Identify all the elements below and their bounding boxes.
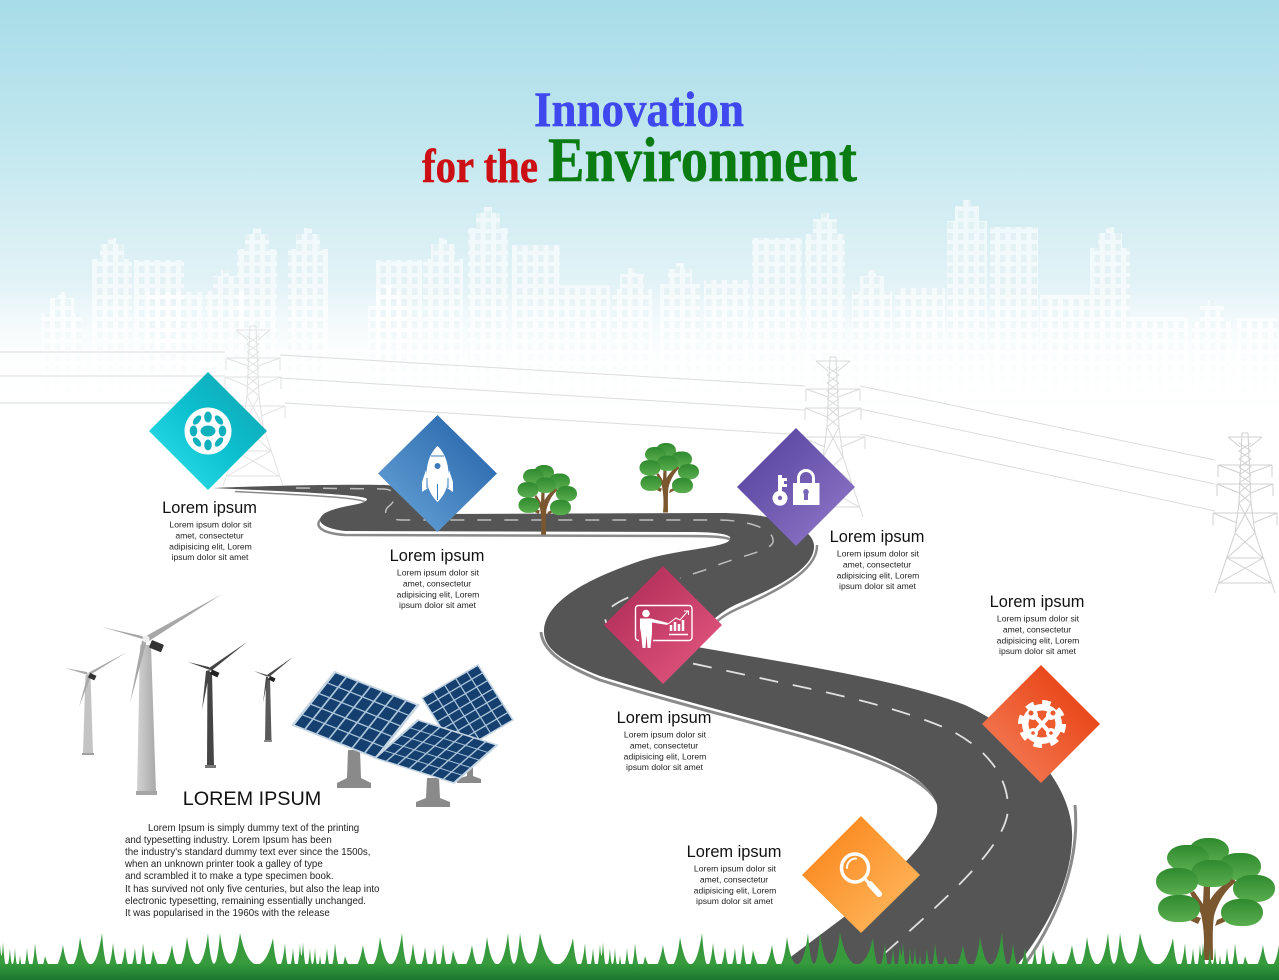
lane markings: far section <box>296 488 773 578</box>
solar panel: back right <box>422 665 513 783</box>
diamond step 5: settings <box>982 665 1100 783</box>
label 1: Lorem ipsum dolor sit <box>169 520 252 530</box>
skyline fade <box>0 290 1279 400</box>
label 1: Lorem ipsum <box>162 499 257 517</box>
solar panels <box>293 665 513 807</box>
icon: globe <box>184 408 232 454</box>
label 1: ipsum dolor sit amet <box>172 552 249 562</box>
diamond step 3: security <box>737 428 855 546</box>
label 4: Lorem ipsum dolor sit <box>997 614 1080 624</box>
tree: bottom right <box>1156 838 1275 960</box>
tree: centre left <box>518 465 577 535</box>
turbine: large <box>102 594 222 795</box>
label 2: adipisicing elit, Lorem <box>397 590 479 600</box>
label 2: Lorem ipsum dolor sit <box>397 568 480 578</box>
title line: for the: for the <box>422 140 538 193</box>
diamond step 1: globe <box>149 372 267 490</box>
pylon: left <box>221 326 285 486</box>
label 4: adipisicing elit, Lorem <box>997 636 1079 646</box>
label 6: Lorem ipsum <box>687 843 781 861</box>
label 6 <box>687 843 781 906</box>
icon: gear with wrenches <box>1021 703 1063 745</box>
paragraph: It was popularised in the 1960s with the release <box>125 908 330 919</box>
pylon: right <box>1213 433 1277 593</box>
icon: magnifying glass <box>842 854 879 894</box>
label 5: adipisicing elit, Lorem <box>624 752 706 762</box>
label 1: adipisicing elit, Lorem <box>169 542 252 552</box>
title <box>422 81 858 195</box>
paragraph: electronic typesetting, remaining essentially unchanged. <box>125 896 366 907</box>
label 4: ipsum dolor sit amet <box>999 646 1077 656</box>
background sky <box>0 0 1279 410</box>
label 1: amet, consectetur <box>175 530 244 540</box>
title line: Environment: Environment <box>548 124 858 195</box>
label 4: amet, consectetur <box>1003 624 1071 634</box>
grass <box>0 930 1279 980</box>
label 3 <box>830 528 924 591</box>
tree: centre right <box>640 443 699 513</box>
label 4: Lorem ipsum <box>990 593 1084 611</box>
paragraph: the industry's standard dummy text ever since the 1500s, <box>125 847 370 858</box>
solar panel: front <box>375 720 497 807</box>
paragraph: and scrambled it to make a type specimen book. <box>125 871 334 882</box>
diamond step 6: search <box>802 816 920 933</box>
turbine: far left <box>65 652 127 755</box>
turbine: small dark <box>254 657 293 742</box>
turbine: dark <box>188 642 247 768</box>
label 4 <box>990 593 1084 656</box>
label 5: ipsum dolor sit amet <box>626 762 704 772</box>
label 6: amet, consectetur <box>700 874 768 884</box>
solar panel: left <box>293 672 418 788</box>
label 5: Lorem ipsum dolor sit <box>624 730 707 740</box>
label 2 <box>390 547 484 610</box>
label 2: amet, consectetur <box>403 578 471 588</box>
power lines <box>0 352 1215 511</box>
icon: rocket <box>422 446 453 502</box>
label 3: amet, consectetur <box>843 560 911 570</box>
paragraph: and typesetting industry. Lorem Ipsum has been <box>125 835 332 846</box>
heading: LOREM IPSUM: LOREM IPSUM <box>183 788 321 810</box>
paragraph: Lorem Ipsum is simply dummy text of the printing <box>148 823 359 834</box>
diamond step 2: rocket <box>378 415 497 532</box>
pylon: centre <box>801 357 865 517</box>
label 5 <box>617 709 711 772</box>
diamond step 4: presentation <box>604 566 722 684</box>
label 6: ipsum dolor sit amet <box>696 896 774 906</box>
label 5: amet, consectetur <box>630 740 698 750</box>
label 2: ipsum dolor sit amet <box>399 600 477 610</box>
wind turbines <box>65 594 293 795</box>
label 3: adipisicing elit, Lorem <box>837 570 919 580</box>
icon: presenter with chart <box>636 606 692 648</box>
lane markings: near section <box>605 585 1008 962</box>
road surface <box>212 485 1072 980</box>
city skyline silhouette <box>42 200 1277 395</box>
road <box>212 485 1076 980</box>
label 1 <box>162 499 257 562</box>
title line: Innovation: Innovation <box>534 81 744 137</box>
road edge stripes <box>235 492 1076 980</box>
label 2: Lorem ipsum <box>390 547 484 565</box>
icon: key and padlock <box>772 469 820 506</box>
label 3: Lorem ipsum dolor sit <box>837 548 920 558</box>
label 6: Lorem ipsum dolor sit <box>694 864 777 874</box>
paragraph <box>124 823 379 919</box>
label 5: Lorem ipsum <box>617 709 711 727</box>
paragraph: when an unknown printer took a galley of type <box>124 859 323 870</box>
paragraph: It has survived not only five centuries, but also the leap into <box>125 884 379 895</box>
label 3: Lorem ipsum <box>830 528 924 546</box>
label 6: adipisicing elit, Lorem <box>694 886 776 896</box>
label 3: ipsum dolor sit amet <box>839 581 917 591</box>
